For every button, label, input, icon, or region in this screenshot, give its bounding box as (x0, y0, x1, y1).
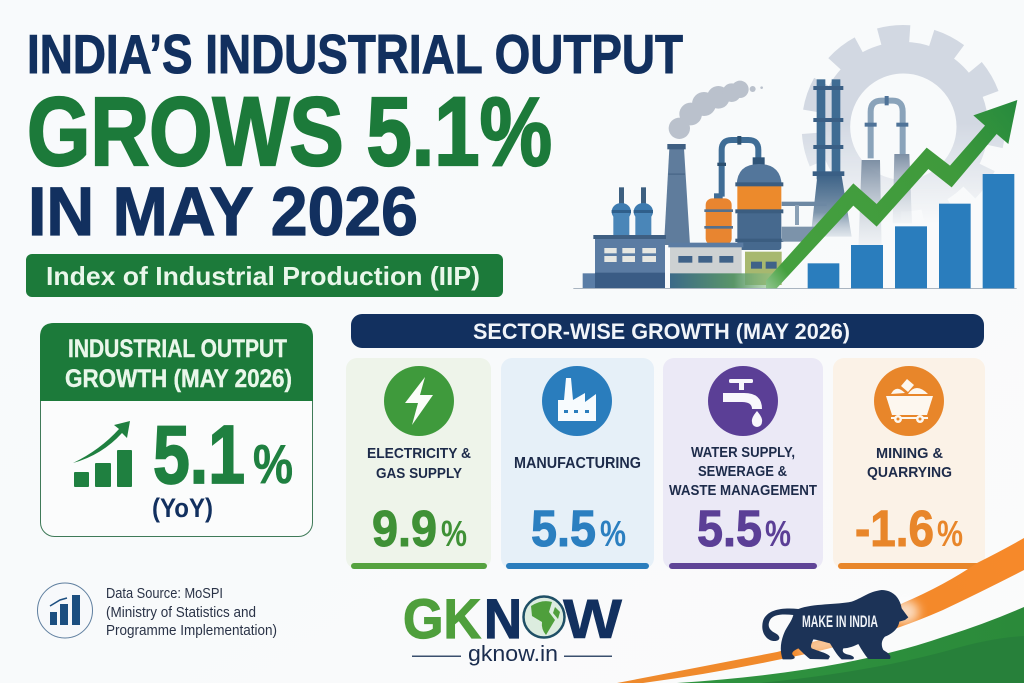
data source text: Data Source: MoSPI (106, 586, 223, 602)
subtitle pill: Index of Industrial Production (26, 254, 503, 297)
icon: rising bars (73, 421, 132, 487)
baseline (573, 288, 1017, 289)
chimney (664, 144, 690, 245)
panel heading: INDUSTRIAL OUTPUT (68, 335, 287, 363)
panel: industrial output growth (40, 323, 313, 536)
icon: water tap (708, 366, 778, 436)
orange tank (704, 193, 733, 245)
arrow: growth trend (766, 100, 1017, 288)
sector label (367, 445, 471, 482)
sector value: 5.5 (531, 500, 596, 557)
heading banner: sector-wise growth: SECTOR-WISE GROWTH (MAY 2026) (473, 319, 850, 344)
sector label (669, 444, 817, 499)
title: IN MAY 2026 (28, 173, 418, 250)
subtitle pill: Index of Industrial Production: Index of Industrial Production (IIP) (46, 261, 480, 291)
decorative tricolour swoosh (617, 538, 1024, 683)
logo: GKNOW (403, 587, 622, 666)
sector value: 5.5 (697, 500, 762, 557)
sector value: % (937, 513, 963, 554)
sector label: MINING & (876, 445, 943, 462)
logo: GKNOW: N (484, 587, 522, 650)
back tower (811, 79, 852, 237)
icon: mine cart (874, 366, 944, 436)
sector value: -1.6 (855, 500, 934, 557)
sector value: % (765, 513, 791, 554)
icon: factory (542, 366, 612, 436)
sector label: WASTE MANAGEMENT (669, 482, 817, 499)
back pipe and stacks (858, 96, 912, 250)
panel: electricity and gas supply (346, 358, 491, 569)
icon: Make in India lion (762, 590, 908, 659)
panel: water supply, sewerage and waste management (663, 358, 823, 569)
sector label: WATER SUPPLY, (691, 444, 795, 461)
icon: background gear (802, 25, 1004, 203)
sector label: SEWERAGE & (698, 463, 787, 480)
icon: Make in India lion: MAKE IN INDIA (802, 612, 878, 631)
sector value: 9.9 (372, 500, 437, 557)
value note: YoY: (YoY) (152, 493, 213, 523)
value: 5.1%: 5.1 (153, 408, 245, 501)
sector label: MANUFACTURING (514, 455, 641, 472)
title (27, 23, 683, 250)
sector label (867, 445, 952, 481)
data source text: (Ministry of Statistics and (106, 605, 256, 621)
heading banner: sector-wise growth (351, 314, 984, 348)
data source text (106, 586, 277, 639)
data source text: Programme Implementation) (106, 623, 277, 639)
bar chart (808, 174, 1014, 288)
icon: globe (524, 596, 564, 638)
bottle towers (612, 187, 653, 236)
smoke (669, 81, 763, 139)
website: gknow.in (468, 641, 558, 666)
logo: GKNOW: W (563, 587, 622, 650)
logo: GKNOW: GK (403, 587, 481, 650)
panel: mining and quarrying (833, 358, 985, 569)
sector value: % (600, 513, 626, 554)
panel heading: GROWTH (MAY 2026) (65, 365, 292, 393)
icon: data source chart (38, 583, 92, 638)
left building (583, 235, 666, 288)
middle building (668, 243, 782, 288)
illustration: factory with growth chart (573, 13, 1017, 289)
icon: lightning bolt (384, 366, 454, 436)
sector label: ELECTRICITY & (367, 445, 471, 462)
big tank with pipe (717, 136, 783, 250)
sector value: % (441, 513, 467, 554)
panel: manufacturing (501, 358, 654, 569)
sector label: QUARRYING (867, 464, 952, 481)
sector label: GAS SUPPLY (376, 465, 462, 482)
title: INDIA’S INDUSTRIAL OUTPUT (27, 23, 683, 85)
panel header (40, 323, 313, 401)
title: GROWS 5.1% (27, 77, 552, 186)
value: 5.1%: % (253, 433, 293, 495)
connecting pipes (782, 202, 827, 242)
panel heading (65, 335, 292, 393)
